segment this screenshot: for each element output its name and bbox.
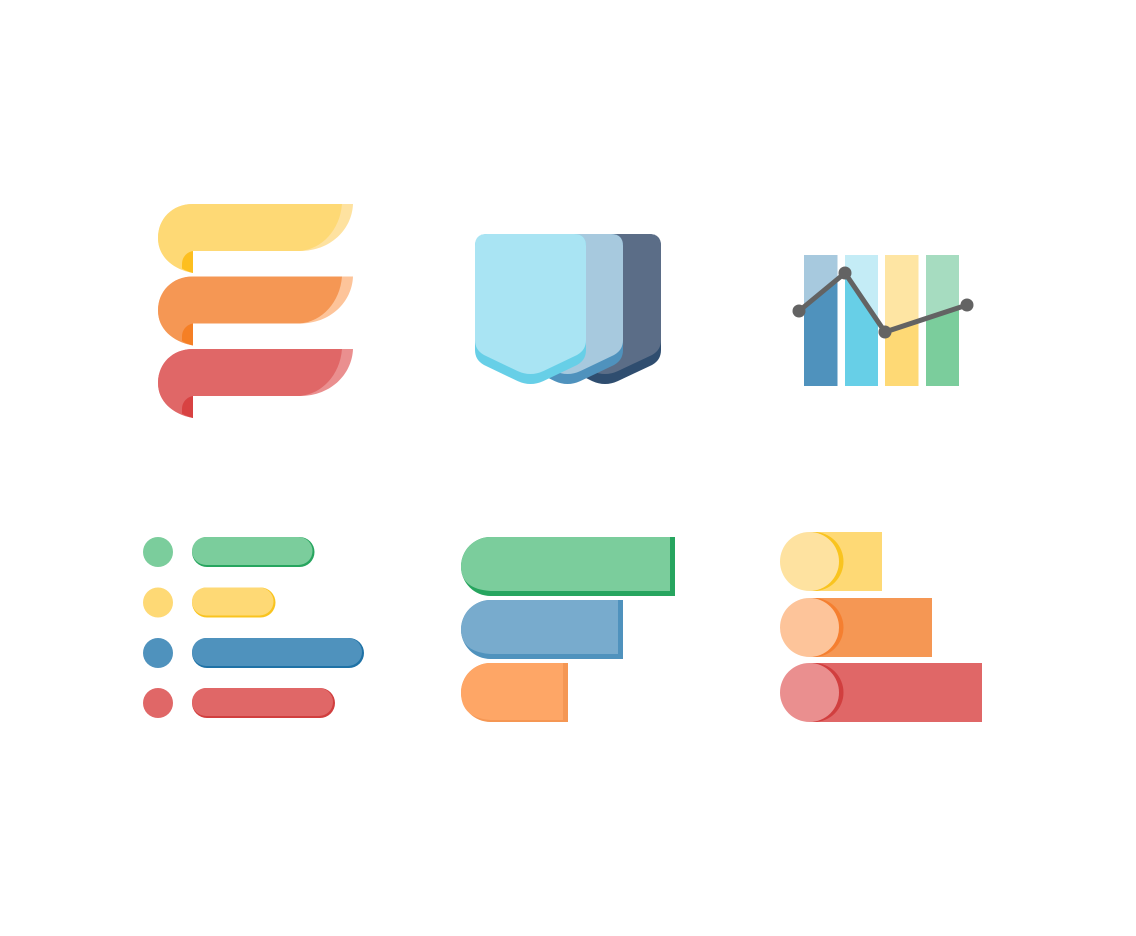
bars: dark lower part	[804, 279, 959, 386]
list row: yellow	[143, 588, 276, 618]
shield: navy back	[550, 234, 661, 384]
capped bar: yellow	[780, 532, 882, 591]
capped bar: red	[780, 663, 982, 722]
panel: bar and line chart	[792, 255, 974, 386]
bar: blue	[461, 600, 623, 659]
ribbon: yellow	[158, 204, 353, 273]
ribbon: red	[158, 349, 353, 418]
panel: legend list	[143, 537, 364, 718]
bar: orange	[461, 663, 568, 722]
bar: green	[461, 537, 675, 596]
shield: blue middle	[520, 234, 623, 384]
line series	[792, 266, 974, 338]
list row: blue	[143, 638, 364, 668]
panel: circle-capped bars	[780, 532, 982, 722]
shield: light front	[475, 234, 586, 384]
panel: ribbon stack	[158, 204, 353, 418]
capped bar: orange	[780, 598, 932, 657]
list row: red	[143, 688, 335, 718]
infographic canvas	[143, 204, 982, 722]
panel: overlapping shields	[475, 234, 661, 384]
panel: rounded bars	[461, 537, 675, 722]
ribbon: orange	[158, 276, 353, 346]
list row: green	[143, 537, 314, 567]
bars: light upper part	[804, 255, 959, 328]
